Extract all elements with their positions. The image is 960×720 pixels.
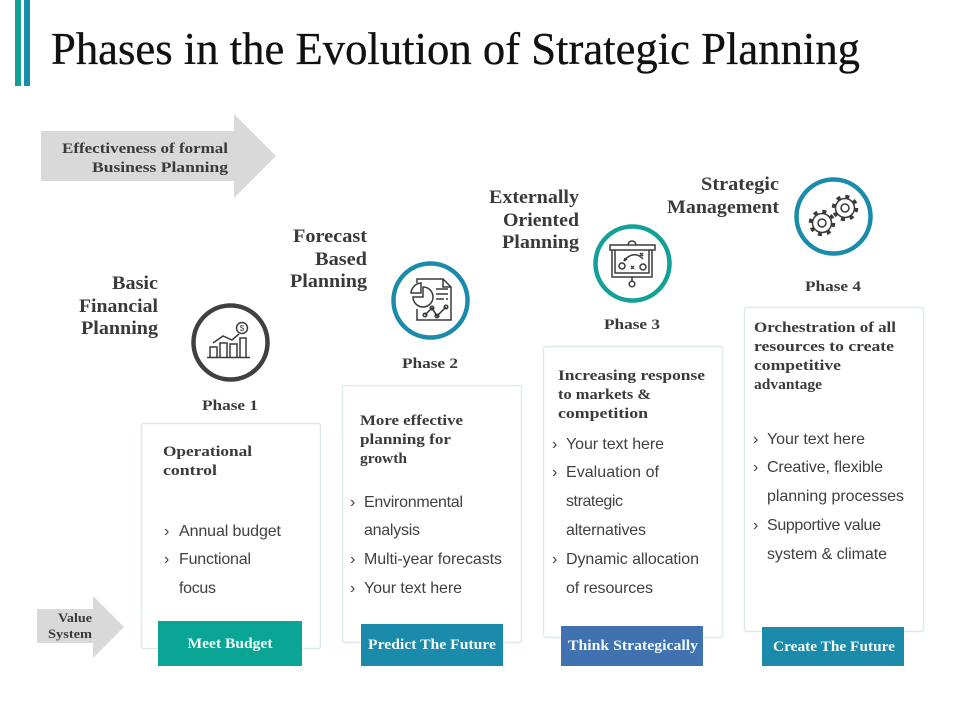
heading: externally oriented planning: Externally: [489, 187, 580, 208]
bullet list: [552, 436, 699, 597]
bullet list: [753, 431, 904, 563]
label bar: create the future: Create The Future: [773, 639, 895, 655]
panel: phase 1: [79, 273, 320, 666]
heading: strategic management: Management: [667, 197, 780, 218]
card heading: More effective: [360, 413, 463, 429]
card heading: control: [163, 463, 217, 479]
heading: basic financial planning: Basic: [112, 273, 158, 294]
card: [342, 386, 522, 642]
bullet list: Supportive value: [767, 517, 881, 534]
arrow: value system: Value: [58, 610, 92, 625]
bullet list: ›: [552, 551, 557, 568]
panel: phase 2: [290, 226, 522, 666]
card heading: [558, 368, 705, 422]
heading: forecast based planning: [290, 226, 368, 292]
bullet list: strategic: [566, 493, 623, 510]
arrow: value system: [37, 596, 124, 658]
card heading: growth: [360, 451, 408, 467]
bullet list: Annual budget: [179, 523, 282, 540]
bullet list: ›: [753, 517, 758, 534]
phase label: Phase 2: [402, 356, 458, 372]
title: Phases in the Evolution of Strategic Planning: [51, 24, 860, 74]
label bar: create the future: [762, 627, 904, 666]
bullet list: focus: [179, 580, 216, 597]
icon: report with pie chart: [394, 264, 468, 338]
bullet list: ›: [552, 436, 557, 453]
bullet list: ›: [164, 523, 169, 540]
bullet list: Your text here: [767, 431, 865, 448]
label bar: meet budget: Meet Budget: [188, 636, 273, 652]
icon: presentation board: [596, 226, 670, 300]
accent bars: [15, 0, 30, 86]
card heading: [754, 320, 896, 393]
bullet list: Your text here: [364, 580, 462, 597]
heading: externally oriented planning: Oriented: [503, 210, 579, 231]
card heading: competition: [558, 406, 649, 422]
card: [544, 346, 722, 638]
card heading: Operational: [163, 444, 252, 460]
card: [142, 424, 320, 648]
bullet list: ›: [552, 464, 557, 481]
heading: forecast based planning: Based: [315, 249, 367, 270]
bullet list: Creative, flexible: [767, 459, 883, 476]
card heading: planning for: [360, 432, 451, 448]
bullet list: Environmental: [364, 494, 463, 511]
heading: basic financial planning: Financial: [79, 296, 158, 317]
heading: basic financial planning: Planning: [81, 318, 159, 339]
bullet list: [164, 523, 282, 597]
bullet list: [350, 494, 502, 597]
bullet list: ›: [753, 431, 758, 448]
label bar: predict the future: Predict The Future: [368, 637, 496, 653]
panel: phase 3: [489, 187, 722, 666]
heading: externally oriented planning: [489, 187, 580, 253]
heading: strategic management: [667, 174, 780, 218]
heading: strategic management: Strategic: [701, 174, 779, 195]
bullet list: Functional: [179, 551, 251, 568]
heading: externally oriented planning: Planning: [502, 232, 580, 253]
bullet list: ›: [350, 580, 355, 597]
card heading: competitive: [754, 358, 841, 374]
card heading: to markets &: [558, 387, 651, 403]
phase label: Phase 1: [202, 398, 258, 414]
bullet list: ›: [164, 551, 169, 568]
label bar: think strategically: Think Strategically: [568, 638, 699, 654]
bullet list: Multi-year forecasts: [364, 551, 502, 568]
phase label: Phase 4: [805, 279, 862, 295]
card heading: Increasing response: [558, 368, 705, 384]
card heading: advantage: [754, 377, 822, 393]
label bar: think strategically: [561, 626, 703, 666]
bullet list: Evaluation of: [566, 464, 660, 481]
bullet list: ›: [350, 551, 355, 568]
icon: bar chart with dollar coin: [194, 306, 268, 380]
heading: forecast based planning: Forecast: [293, 226, 368, 247]
heading: basic financial planning: [79, 273, 159, 339]
phase label: Phase 3: [604, 317, 660, 333]
bullet list: ›: [753, 459, 758, 476]
bullet list: alternatives: [566, 522, 646, 539]
card heading: [163, 444, 252, 479]
bullet list: analysis: [364, 522, 420, 539]
card heading: resources to create: [754, 339, 894, 355]
label bar: meet budget: [158, 621, 302, 666]
arrow: value system: System: [48, 626, 92, 641]
bullet list: Dynamic allocation: [566, 551, 699, 568]
heading: forecast based planning: Planning: [290, 271, 368, 292]
bullet list: Your text here: [566, 436, 664, 453]
card heading: [360, 413, 463, 467]
panel: phase 4: [667, 174, 924, 666]
bullet list: of resources: [566, 580, 653, 597]
arrow: effectiveness of formal business planning: Business Planning: [92, 160, 229, 176]
icon: gears: [796, 180, 870, 254]
card heading: Orchestration of all: [754, 320, 896, 336]
icon: bar chart with dollar coin: $: [240, 324, 245, 333]
label bar: predict the future: [361, 624, 503, 666]
arrow: effectiveness of formal business planning: [41, 114, 276, 198]
bullet list: system & climate: [767, 546, 887, 563]
card: [744, 308, 924, 632]
bullet list: ›: [350, 494, 355, 511]
arrow: effectiveness of formal business planning: Effectiveness of formal: [62, 141, 228, 157]
bullet list: planning processes: [767, 488, 904, 505]
